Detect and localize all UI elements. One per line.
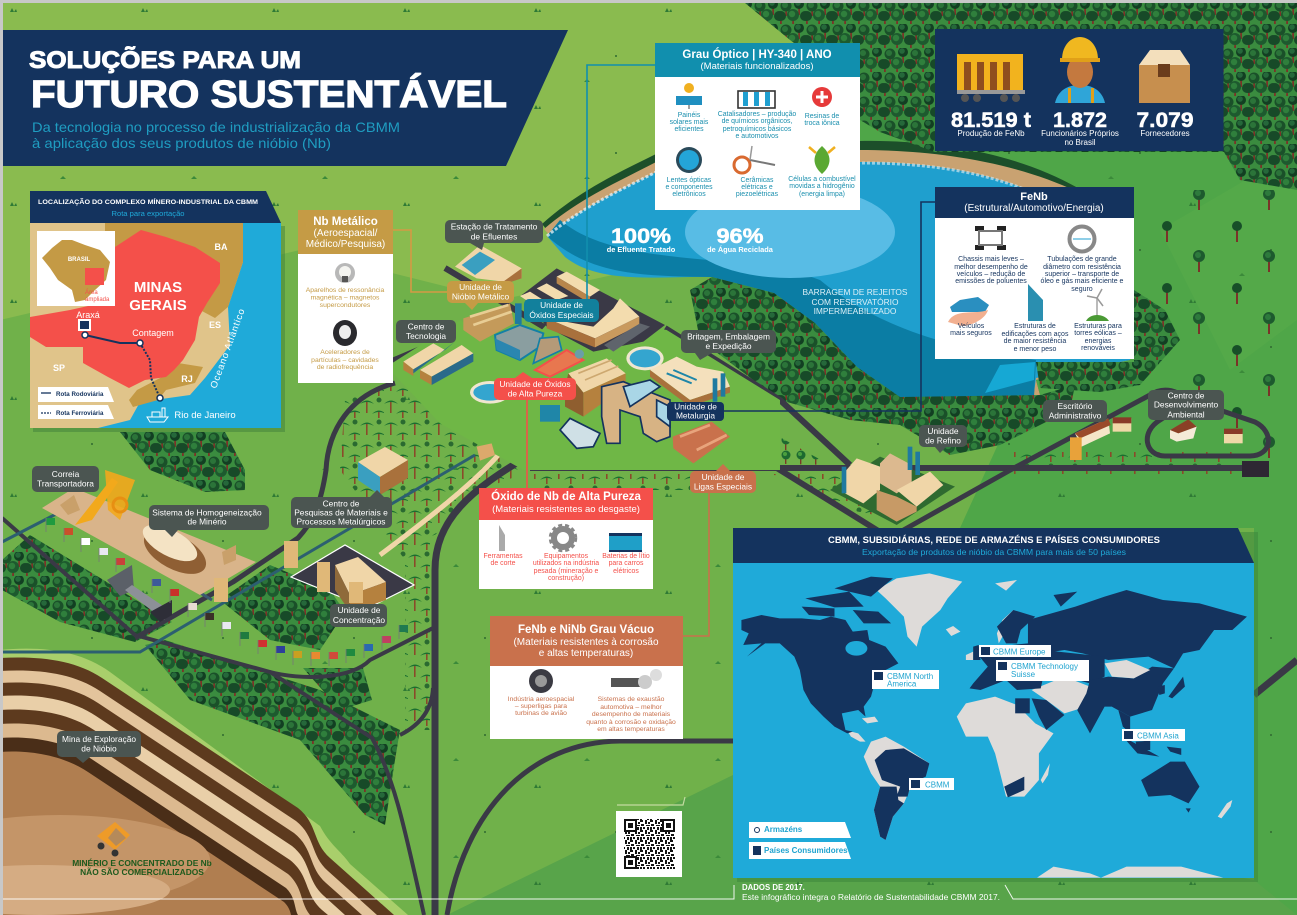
map tag: CBMM North America: America — [887, 680, 917, 688]
icon: turbine — [529, 669, 553, 693]
dam label: IMPERMEABILIZADO — [814, 306, 897, 316]
label: Desenvolvimento Ambiental: Centro de — [1168, 390, 1205, 400]
panel: statistics: Produção de FeNb — [957, 129, 1025, 138]
label: Concentração — [330, 604, 387, 627]
map tag: CBMM Asia — [1122, 729, 1185, 741]
panel: FeNb: seguro — [1071, 286, 1093, 293]
panel: statistics: Funcionários Próprios — [1041, 129, 1119, 138]
label: Centro de Tecnologia: Tecnologia — [406, 331, 446, 341]
panel: Grau Óptico — [655, 43, 860, 210]
panel: Óxido de Nb de Alta Pureza: de corte — [491, 560, 516, 567]
panel: location map — [30, 191, 285, 432]
tailings dam reservoir — [542, 141, 1130, 397]
panel: statistics: 81.519 t — [951, 109, 1031, 132]
stockyard with ore pile — [42, 470, 256, 595]
refining unit — [830, 447, 955, 525]
panel: FeNb e NiNb Grau Vácuo: Indústria aeroespacial — [508, 696, 575, 703]
state labels: BA — [214, 242, 228, 252]
panel: Nb Metálico: (Aeroespacial/ — [314, 228, 378, 239]
label: Nióbio Metálico: Nióbio Metálico — [452, 292, 509, 302]
routes — [82, 332, 163, 401]
state labels: Rio de Janeiro — [174, 410, 236, 421]
panel: Óxido de Nb de Alta Pureza: elétricos — [613, 568, 639, 575]
map tag: CBMM Europe: CBMM Europe — [993, 648, 1046, 656]
dam label: BARRAGEM DE REJEITOS — [802, 287, 908, 297]
special alloys unit — [673, 422, 730, 463]
map tag: CBMM Asia: CBMM Asia — [1137, 732, 1179, 740]
panel: Óxido de Nb de Alta Pureza: Baterias de lítio — [602, 553, 650, 560]
conveyor junction box — [477, 443, 495, 461]
panel: FeNb: óleo e gás mais eficiente e — [1041, 278, 1124, 285]
panel: Grau Óptico: Cerâmicas — [741, 177, 774, 184]
panel: Grau Óptico: Resinas de — [805, 113, 839, 120]
icon: pipe section — [1070, 226, 1094, 252]
panel: FeNb: diâmetro com resistência — [1043, 264, 1121, 271]
panel: statistics — [935, 29, 1224, 151]
panel: Grau Óptico: elétricas e — [741, 184, 773, 191]
label: Escritório: Escritório — [1058, 401, 1093, 411]
central hall — [540, 358, 626, 422]
roads — [2, 268, 1297, 915]
loop ground — [522, 268, 665, 352]
palm groves — [340, 385, 1240, 730]
label: Concentração: Unidade de — [338, 605, 381, 615]
panel: FeNb: (Estrutural/Automotivo/Energia) — [964, 203, 1104, 214]
map tag: CBMM: CBMM — [925, 780, 950, 790]
icon: chassis — [975, 226, 1006, 250]
panel: Grau Óptico: Painéis — [678, 112, 701, 119]
mine caption: MINÉRIO E CONCENTRADO DE Nb — [72, 857, 212, 868]
data note — [742, 883, 1000, 902]
mine pit — [0, 649, 408, 915]
icon: rail wagon — [957, 54, 1025, 102]
panel: statistics: 7.079 — [1136, 109, 1194, 132]
panel: FeNb: superior – transporte de — [1045, 271, 1119, 278]
icon: mine truck — [97, 822, 130, 856]
panel: Grau Óptico: eletrônicos — [672, 191, 706, 198]
inset: Brazil: Área — [85, 289, 98, 296]
panel: Nb Metálico: Aceleradores de — [320, 349, 370, 356]
panel: FeNb: veículos – redução de — [957, 271, 1025, 278]
state labels: GERAIS — [129, 297, 187, 314]
icon: battery — [609, 533, 642, 552]
panel: FeNb: Estruturas de — [1014, 323, 1056, 330]
mills building — [560, 380, 670, 448]
icon: gear — [550, 525, 576, 551]
label: Óxidos Especiais: Unidade de — [540, 300, 583, 310]
panel: Nb Metálico: Aparelhos de ressonância — [306, 287, 385, 294]
panel: Óxido de Nb de Alta Pureza: Óxido de Nb de Alta Pureza — [491, 490, 641, 503]
label: Ligas Especiais: Ligas Especiais — [694, 482, 752, 492]
label: Refino: Unidade — [927, 426, 959, 436]
panel: FeNb e NiNb Grau Vácuo: (Materiais resistentes à corrosão — [513, 637, 659, 648]
label: Desenvolvimento Ambiental — [1148, 390, 1224, 420]
icon: optical lens — [676, 147, 702, 173]
label: Estação de Tratamento: Estação de Tratamento — [451, 222, 538, 232]
reservoir statistics: 96% — [716, 225, 764, 248]
panel: FeNb: emissões de poluentes — [955, 278, 1027, 285]
label: Homogeneização: Sistema de Homogeneização — [152, 508, 262, 518]
label: Nióbio Metálico: Unidade de — [459, 282, 502, 292]
icon: resonance magnet — [335, 263, 355, 283]
map header: Rota para exportação — [111, 209, 185, 218]
panel: Nb Metálico: Nb Metálico — [313, 216, 378, 228]
label: Óxidos de Alta Pureza: de Alta Pureza — [508, 388, 563, 398]
label: Homogeneização — [149, 505, 269, 537]
map tag: CBMM North America: CBMM North — [887, 672, 933, 681]
dam label: COM RESERVATÓRIO — [811, 297, 899, 307]
panel: Grau Óptico: piezoelétricas — [736, 191, 779, 198]
panel: FeNb: e menor peso — [1014, 346, 1057, 353]
map header: Exportação de produtos de nióbio da CBMM para mais de 50 países — [862, 547, 1126, 557]
panel: Óxido de Nb de Alta Pureza: pesada (mineração e — [534, 568, 599, 575]
panel: FeNb: FeNb — [1020, 191, 1048, 203]
panel: FeNb e NiNb Grau Vácuo: Sistemas de exaustão — [598, 696, 665, 703]
state labels: SP — [53, 363, 65, 373]
panel: Grau Óptico: troca iônica — [804, 120, 840, 127]
icon: ship — [147, 408, 168, 422]
lawn base — [387, 310, 780, 470]
label: Escritório: Administrativo — [1049, 410, 1102, 420]
label: Centro de Pesquisas: Pesquisas de Materiais e — [294, 508, 388, 518]
panel: Nb Metálico: partículas – cavidades — [311, 357, 379, 364]
panel: FeNb e NiNb Grau Vácuo: desempenho de materiais — [592, 711, 671, 718]
panel: Grau Óptico: petroquímicos básicos — [723, 126, 792, 133]
panel: FeNb — [935, 187, 1134, 359]
icon: test tubes — [738, 91, 775, 108]
label: Refino: de Refino — [925, 436, 961, 446]
panel: Grau Óptico: Lentes ópticas — [667, 177, 712, 184]
research centre building — [358, 447, 408, 495]
reservoir statistics — [607, 225, 774, 254]
flags — [46, 518, 408, 666]
route legend: Rota Rodoviária — [56, 391, 104, 398]
state labels: Araxá — [76, 310, 100, 320]
label: Correia Transportadora: Correia — [52, 469, 80, 479]
panel: Nb Metálico — [298, 210, 393, 383]
icon: wind turbine — [1086, 289, 1109, 321]
panel: Grau Óptico: Células a combustível — [788, 176, 856, 183]
icon: accelerator ring — [333, 320, 357, 346]
map header: LOCALIZAÇÃO DO COMPLEXO MÍNERO-INDUSTRIAL DA CBMM — [38, 197, 259, 206]
label: Mina: Mina de Exploração — [62, 734, 136, 744]
panel: FeNb: Tubulações de grande — [1047, 256, 1117, 263]
label: Ligas Especiais: Unidade de — [702, 472, 745, 482]
mine caption: NÃO SÃO COMERCIALIZADOS — [80, 867, 204, 877]
title panel — [3, 30, 568, 166]
panel: Grau Óptico: eficientes — [674, 126, 704, 133]
title panel: à aplicação dos seus produtos de nióbio (Nb) — [32, 135, 331, 151]
data note: DADOS DE 2017. — [742, 883, 805, 892]
map header — [733, 528, 1254, 563]
panel: statistics: Fornecedores — [1140, 129, 1190, 138]
icon: ceramic ring — [734, 146, 775, 173]
panel: FeNb: Chassis mais leves – — [958, 256, 1024, 263]
panel: FeNb: torres eólicas – — [1074, 330, 1122, 337]
state labels: MINAS — [134, 279, 182, 296]
label: Ligas Especiais — [690, 464, 756, 493]
panel: FeNb e NiNb Grau Vácuo: em altas temperaturas — [597, 726, 665, 733]
truck and weighbridge — [107, 565, 172, 622]
panel: statistics: 1.872 — [1053, 109, 1107, 132]
environmental centre — [1170, 419, 1243, 443]
connector lines — [393, 65, 935, 636]
label: Estação de Tratamento: de Efluentes — [471, 232, 517, 242]
title panel: FUTURO SUSTENTÁVEL — [31, 72, 507, 116]
map tag: CBMM Technology Suisse: CBMM Technology — [1011, 662, 1078, 671]
icon: worker — [1055, 37, 1105, 103]
panel: FeNb e NiNb Grau Vácuo: turbinas de avião — [515, 710, 567, 717]
QR code — [616, 811, 682, 877]
icon: solar panel — [676, 83, 702, 109]
label: Britagem: Britagem, Embalagem — [687, 332, 770, 342]
panel: Óxido de Nb de Alta Pureza — [479, 488, 653, 589]
reservoir statistics: 100% — [611, 225, 671, 248]
map legend: Armazéns — [764, 825, 803, 834]
panel: FeNb: Estruturas para — [1074, 323, 1122, 330]
label: Refino — [919, 425, 967, 453]
map header — [30, 191, 281, 223]
panel: Grau Óptico: solares mais — [670, 119, 709, 126]
blue-grey building — [495, 303, 562, 363]
panel: FeNb: mais seguros — [950, 330, 992, 337]
world landmass — [741, 573, 1247, 878]
panel: FeNb: melhor desempenho de — [954, 264, 1028, 271]
icon: building — [1028, 284, 1043, 321]
label: Centro de Tecnologia — [396, 320, 456, 343]
panel: FeNb: energias — [1085, 338, 1112, 345]
label: Óxidos Especiais — [524, 299, 599, 322]
panel: Óxido de Nb de Alta Pureza: construção) — [548, 575, 584, 582]
label: Escritório — [1043, 400, 1107, 422]
label: Centro de Pesquisas — [291, 490, 392, 528]
special oxides building — [520, 272, 639, 347]
panel: FeNb: edificações com aços — [1002, 331, 1069, 338]
label: Óxidos de Alta Pureza — [494, 372, 576, 400]
label: Correia Transportadora: Transportadora — [37, 478, 94, 488]
technology centre sheds — [403, 342, 473, 385]
map legend — [749, 822, 851, 859]
state labels: ES — [209, 320, 221, 330]
label: Desenvolvimento Ambiental: Desenvolvimento — [1154, 400, 1218, 410]
icon: cutting tool — [499, 525, 505, 551]
niobium metal unit — [463, 303, 514, 342]
trucks — [604, 323, 650, 352]
map tag: CBMM Technology Suisse: Suisse — [1011, 670, 1036, 679]
dam label — [802, 287, 908, 316]
panel: FeNb: renováveis — [1081, 345, 1115, 352]
panel: Óxido de Nb de Alta Pureza: utilizados na indústria — [533, 560, 599, 567]
settling ponds — [470, 346, 664, 404]
panel: statistics: no Brasil — [1064, 138, 1096, 147]
mine caption — [72, 857, 212, 877]
panel: Grau Óptico: Grau Óptico | HY-340 | ANO — [682, 48, 832, 61]
administrative office — [1070, 417, 1131, 460]
road end block — [1242, 461, 1269, 477]
inset: Brazil: BRASIL — [68, 257, 90, 263]
state labels: Contagem — [132, 328, 174, 338]
label: Desenvolvimento Ambiental: Ambiental — [1167, 410, 1205, 420]
reservoir statistics: de Água Reciclada — [707, 245, 774, 254]
panel: Óxido de Nb de Alta Pureza: Ferramentas — [483, 553, 523, 560]
panel: Grau Óptico: (energia limpa) — [799, 191, 845, 198]
panel: FeNb e NiNb Grau Vácuo — [490, 616, 683, 739]
data note: Este infográfico integra o Relatório de Sustentabilidade CBMM 2017. — [742, 893, 1000, 902]
label: Nióbio Metálico — [447, 281, 514, 310]
map tag: CBMM Technology Suisse — [996, 660, 1089, 681]
icon: car on hand — [948, 297, 989, 326]
map tag: CBMM Europe — [979, 645, 1051, 657]
concentration unit — [214, 541, 414, 612]
icon: CBMM marker — [78, 319, 91, 331]
panel: Grau Óptico: (Materiais funcionalizados) — [700, 61, 814, 72]
panel: FeNb e NiNb Grau Vácuo: FeNb e NiNb Grau Vácuo — [518, 624, 654, 636]
icon: ion resin — [812, 87, 832, 107]
label: Concentração: Concentração — [333, 615, 385, 625]
label: Metalurgia: Metalurgia — [676, 410, 715, 420]
panel: FeNb: Veículos — [958, 323, 985, 330]
industrial complex buildings — [387, 245, 780, 470]
panel: Nb Metálico: de radiofrequência — [317, 364, 373, 371]
panel: FeNb e NiNb Grau Vácuo: quanto à corrosão e oxidação — [586, 719, 676, 726]
reservoir statistics: de Efluente Tratado — [607, 245, 676, 254]
title panel: Da tecnologia no processo de industrialização da CBMM — [32, 119, 400, 135]
panel: Grau Óptico: e automotivos — [736, 133, 779, 140]
label: Britagem: e Expedição — [705, 341, 752, 351]
label: Óxidos Especiais: Óxidos Especiais — [529, 310, 594, 320]
map header: CBMM, SUBSIDIÁRIAS, REDE DE ARMAZÉNS E PAÍSES CONSUMIDORES — [828, 535, 1160, 546]
label: Correia Transportadora — [32, 466, 99, 492]
panel: Grau Óptico: e componentes — [665, 184, 713, 191]
panel: Nb Metálico: Médico/Pesquisa) — [306, 239, 385, 250]
crushing and shipping shed — [650, 357, 730, 407]
label: Mina: de Nióbio — [81, 744, 117, 754]
panel: FeNb e NiNb Grau Vácuo: – superligas para — [515, 703, 567, 710]
map tag: CBMM North America — [872, 670, 939, 689]
panel: FeNb e NiNb Grau Vácuo: e altas temperaturas) — [539, 648, 633, 659]
panel: FeNb e NiNb Grau Vácuo: automotiva – melhor — [600, 704, 663, 711]
panel: Óxido de Nb de Alta Pureza: para carros — [609, 560, 644, 567]
panel: world map — [733, 528, 1258, 882]
title panel: SOLUÇÕES PARA UM — [29, 46, 301, 74]
refining unit and offices — [830, 417, 1243, 525]
label: Britagem — [681, 330, 776, 360]
map tag: CBMM — [909, 778, 954, 790]
panel: Grau Óptico: movidas a hidrogênio — [789, 183, 855, 190]
label: Estação de Tratamento — [445, 220, 543, 250]
panel: Nb Metálico: supercondutores — [320, 302, 371, 309]
route legend: Rota Ferroviária — [56, 410, 104, 417]
label: Centro de Pesquisas: Centro de — [323, 498, 360, 508]
label: Metalurgia: Unidade de — [674, 402, 717, 412]
label: Centro de Pesquisas: Processos Metalúrgicos — [297, 516, 385, 526]
icon: leaf with bolts — [809, 146, 835, 174]
label: Óxidos de Alta Pureza: Unidade de Óxidos — [499, 379, 571, 389]
label: Centro de Tecnologia: Centro de — [408, 322, 445, 332]
state labels — [53, 242, 248, 421]
high purity oxides building — [535, 349, 584, 377]
icon: exhaust — [611, 669, 662, 689]
label: Metalurgia — [667, 402, 724, 421]
panel: Grau Óptico: de químicos orgânicos, — [722, 118, 793, 125]
state labels: RJ — [181, 374, 193, 384]
inset: Brazil: ampliada — [85, 297, 110, 303]
label: Homogeneização: de Minério — [187, 516, 227, 526]
panel: Óxido de Nb de Alta Pureza: (Materiais resistentes ao desgaste) — [492, 504, 640, 515]
panel: Nb Metálico: magnética – magnetos — [311, 294, 380, 302]
inset: Brazil — [37, 231, 115, 306]
state labels: Oceano Atlântico — [208, 307, 248, 390]
label: Mina — [57, 731, 141, 763]
icon: box — [1139, 50, 1190, 103]
conveyor belts — [2, 440, 510, 652]
panel: FeNb: de maior resistência — [1004, 338, 1066, 345]
panel: Grau Óptico: Catalisadores – produção — [718, 111, 796, 118]
map legend: Países Consumidores — [764, 846, 848, 855]
panel: Óxido de Nb de Alta Pureza: Equipamentos — [544, 553, 589, 560]
route legend — [38, 387, 114, 419]
effluent treatment station — [455, 245, 522, 283]
